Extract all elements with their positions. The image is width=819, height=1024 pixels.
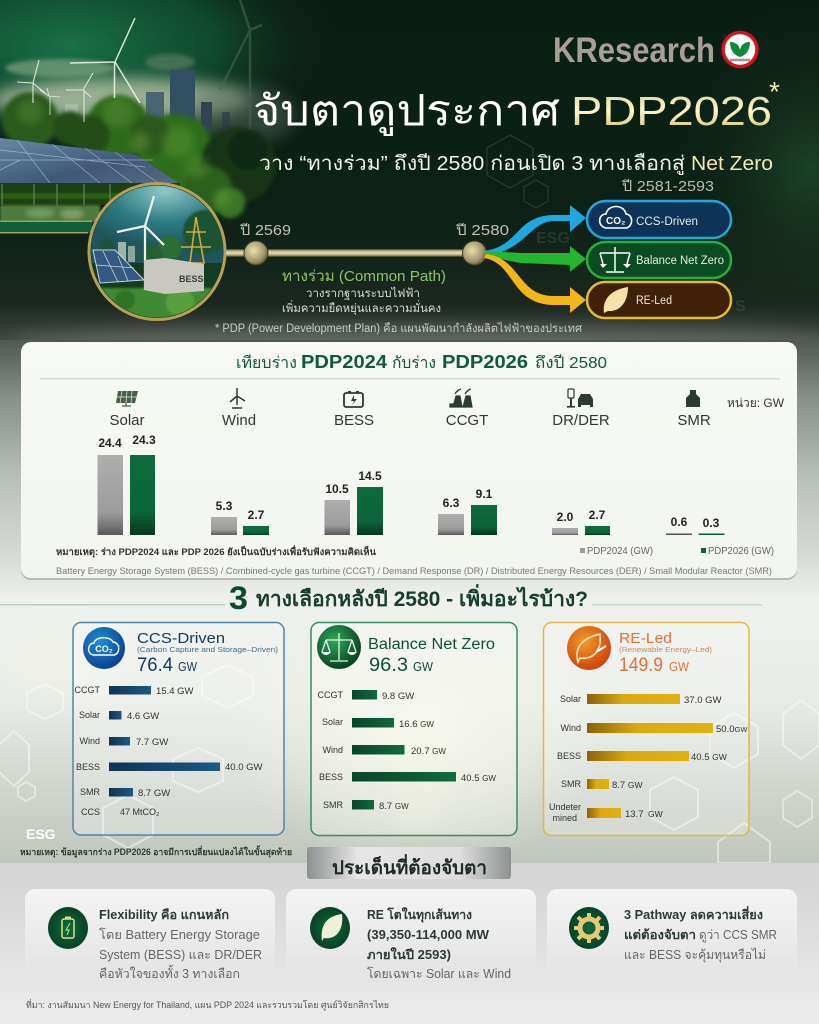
icon: leaf bbox=[310, 907, 350, 949]
category: Solar: 24.4 bbox=[98, 436, 122, 450]
icon: CO2 cloud: CO₂ bbox=[95, 644, 113, 654]
arrows: three pathways bbox=[484, 205, 586, 313]
heading bbox=[368, 636, 495, 676]
category: BESS: 14.5 bbox=[358, 469, 382, 483]
timeline: common path bbox=[226, 222, 509, 265]
text: Flexibility คือ แกนหลัก bbox=[99, 908, 229, 922]
footnote: PDP definition: * PDP (Power Development Plan) คือ แผนพัฒนากำลังผลิตไฟฟ้าของประเทศ bbox=[215, 322, 583, 335]
arrow: CCS bbox=[484, 205, 586, 256]
bar: CCGT: CCGT bbox=[318, 690, 343, 700]
chart heading bbox=[236, 352, 607, 372]
bar: SMR bbox=[323, 800, 409, 812]
bar: Wind: 50.0GW bbox=[716, 724, 748, 735]
card: RE growth bbox=[286, 889, 536, 993]
heading: RE-Led bbox=[619, 630, 672, 647]
bar: BESS bbox=[319, 772, 496, 784]
logo: KResearch: KResearch bbox=[553, 31, 715, 70]
bar: SMR: SMR bbox=[561, 779, 582, 789]
bar: BESS: 40.5 GW bbox=[691, 752, 727, 763]
bar: Wind: 20.7 GW bbox=[411, 746, 446, 757]
text: และ BESS จะคุ้มทุนหรือไม่ bbox=[624, 948, 766, 963]
bar: BESS bbox=[76, 762, 263, 773]
bar: Undetermined: GW bbox=[648, 809, 663, 819]
heading bbox=[137, 630, 279, 676]
bar: SMR bbox=[561, 779, 642, 791]
panel: CCS-Driven bbox=[73, 622, 284, 835]
heading: CCS-Driven bbox=[137, 630, 225, 647]
text: common path description bbox=[282, 268, 446, 315]
label: period 2581-2593: ปี 2581-2593 bbox=[622, 178, 714, 195]
bar: Wind bbox=[560, 723, 748, 735]
bar: Undetermined: mined bbox=[552, 813, 577, 823]
card: 3 Pathway bbox=[547, 889, 797, 993]
panel: hero background bbox=[0, 0, 819, 345]
icon: gas plant bbox=[450, 389, 472, 407]
bar: Solar bbox=[322, 717, 434, 730]
trees bbox=[2, 92, 276, 218]
icon: reactor bbox=[686, 390, 700, 407]
circle illustration: BESS: BESS bbox=[179, 274, 204, 284]
icon: CO2 cloud bbox=[83, 627, 125, 669]
bar: BESS: BESS bbox=[319, 772, 343, 782]
category: CCGT: CCGT bbox=[446, 412, 488, 429]
bar: BESS: 40.0 GW bbox=[225, 762, 263, 773]
text: common path description: ทางร่วม (Common Path) bbox=[282, 268, 446, 285]
bar: CCGT: CCGT bbox=[74, 685, 100, 695]
title: * bbox=[769, 76, 780, 107]
row: CCS bbox=[81, 807, 160, 817]
heading: three options bbox=[0, 580, 762, 616]
category: Wind bbox=[211, 388, 269, 535]
category: CCGT bbox=[438, 389, 497, 535]
pill: Balance Net Zero bbox=[587, 242, 731, 278]
heading: watch points bbox=[307, 847, 511, 879]
title: จับตาดูประกาศ bbox=[253, 87, 560, 136]
icon: EV charger and car bbox=[567, 389, 593, 408]
bar: SMR: SMR bbox=[80, 787, 100, 797]
heading: (Renewable Energy–Led) bbox=[619, 645, 713, 654]
category: Solar: 24.3 bbox=[132, 433, 156, 447]
text bbox=[367, 907, 511, 981]
grass below array bbox=[0, 183, 180, 205]
heading: (Carbon Capture and Storage–Driven) bbox=[137, 645, 279, 654]
arrow: RE bbox=[484, 254, 586, 313]
pill: Balance Net Zero: Balance Net Zero bbox=[636, 255, 724, 267]
bar: Wind: Wind bbox=[560, 723, 581, 733]
bar: SMR: 8.7 GW bbox=[138, 788, 170, 799]
subtitle: Net Zero bbox=[691, 153, 773, 175]
text: 3 Pathway ลดความเสี่ยง bbox=[624, 906, 763, 922]
text: (39,350-114,000 MW bbox=[367, 928, 489, 942]
bar: CCGT: 9.8 GW bbox=[382, 691, 414, 702]
bar: Wind: 7.7 GW bbox=[136, 737, 168, 748]
bar: BESS bbox=[557, 751, 727, 763]
heading: GW bbox=[669, 659, 690, 674]
pill: CCS-Driven: CO₂ bbox=[606, 216, 625, 227]
heading: 76.4 bbox=[137, 655, 173, 676]
arrow: Balance bbox=[486, 246, 586, 272]
heading: 149.9 bbox=[619, 655, 663, 676]
category: CCGT: 9.1 bbox=[476, 487, 493, 501]
category: DR/DER bbox=[552, 389, 610, 535]
text: โดย Battery Energy Storage bbox=[99, 927, 260, 942]
category: Wind: 5.3 bbox=[216, 499, 233, 513]
legend bbox=[580, 546, 774, 557]
heading: Balance Net Zero bbox=[368, 636, 495, 653]
category: DR/DER: 2.0 bbox=[557, 510, 574, 524]
bar: Undetermined bbox=[549, 802, 663, 823]
pill: RE-Led bbox=[587, 282, 731, 318]
bar: SMR bbox=[80, 787, 170, 799]
category: Solar bbox=[98, 391, 156, 535]
abbreviations: Battery Energy Storage System (BESS) / Combined-cycle gas turbine (CCGT) / Demand Response (DR) / Distributed Energy Resources (DER) / Small Modular Reactor (SMR) bbox=[56, 566, 772, 576]
chart heading: PDP2026 bbox=[442, 352, 528, 372]
bar: Solar: 4.6 GW bbox=[127, 711, 159, 722]
text: โดยเฉพาะ Solar และ Wind bbox=[367, 966, 511, 981]
icon: wind turbines bbox=[17, 18, 140, 122]
legend: PDP2026 (GW) bbox=[708, 546, 774, 557]
hexagon watermarks: S bbox=[735, 298, 746, 315]
text: common path description: เพิ่มความยืดหยุ่นและความมั่นคง bbox=[282, 300, 441, 315]
pill: CCS-Driven: CCS-Driven bbox=[636, 216, 698, 228]
bar: SMR: 8.7 GW bbox=[612, 780, 642, 791]
heading: GW bbox=[178, 659, 198, 674]
panel: Balance Net Zero bbox=[311, 622, 517, 836]
timeline: common path: ปี 2580 bbox=[456, 222, 509, 239]
bar: Solar: Solar bbox=[79, 710, 100, 720]
hexagon watermarks: ESG bbox=[536, 230, 570, 247]
panel: watch points background bbox=[0, 863, 819, 1024]
icon: solar panel bbox=[116, 391, 138, 406]
bar: BESS: BESS bbox=[76, 762, 100, 772]
heading: GW bbox=[413, 659, 434, 674]
panel: middle background bbox=[0, 340, 819, 870]
chart heading: ถึงปี 2580 bbox=[535, 354, 607, 372]
timeline: common path: ปี 2569 bbox=[240, 222, 291, 239]
bar: Wind bbox=[79, 736, 168, 748]
solar array bbox=[0, 138, 178, 183]
category: SMR: 0.3 bbox=[703, 516, 720, 530]
note: draft data: หมายเหตุ: ข้อมูลจากร่าง PDP2026 อาจมีการเปลี่ยนแปลงได้ในขั้นสุดท้าย bbox=[20, 845, 292, 858]
icon: wind turbine bbox=[230, 388, 245, 408]
smoke at hero bottom bbox=[10, 326, 819, 354]
bar: Undetermined: 13.7 bbox=[625, 809, 644, 820]
pill: CCS-Driven bbox=[587, 201, 731, 238]
category: Wind: Wind bbox=[222, 412, 256, 429]
source: ที่มา: งานสัมมนา New Energy for Thailand, แผน PDP 2024 และรวบรวมโดย ศูนย์วิจัยกสิกรไทย bbox=[26, 998, 389, 1011]
bar: Solar: Solar bbox=[560, 694, 581, 704]
heading: three options: 3 bbox=[229, 580, 248, 616]
category: BESS: BESS bbox=[334, 412, 374, 429]
bar: CCGT: 15.4 GW bbox=[156, 686, 194, 697]
buildings bbox=[170, 70, 195, 120]
panel: RE-Led bbox=[544, 622, 749, 836]
category: CCGT: 6.3 bbox=[443, 496, 460, 510]
bar: Wind: Wind bbox=[79, 736, 100, 746]
panel: PDP comparison chart bbox=[21, 342, 797, 580]
chart heading: กับร่าง bbox=[392, 355, 436, 372]
icon: scales bbox=[317, 625, 361, 669]
category: DR/DER: 2.7 bbox=[589, 508, 606, 522]
title: PDP2026 bbox=[571, 88, 772, 134]
row: CCS: CCS bbox=[81, 807, 100, 817]
category: Solar: Solar bbox=[109, 412, 145, 429]
text: common path description: วางรากฐานระบบไฟฟ้า bbox=[306, 287, 420, 300]
text: ภายในปี 2593) bbox=[367, 947, 451, 962]
bar: BESS: 40.5 GW bbox=[461, 773, 496, 784]
category: BESS: 10.5 bbox=[325, 482, 349, 496]
pill: RE-Led: RE-Led bbox=[636, 295, 672, 307]
category: SMR bbox=[666, 390, 724, 535]
chart note: หมายเหตุ: ร่าง PDP2024 และ PDP 2026 ยังเป็นฉบับร่างเพื่อรับฟังความคิดเห็น bbox=[56, 544, 377, 558]
chart heading: เทียบร่าง bbox=[236, 354, 297, 372]
text: ดูว่า CCS SMR bbox=[699, 928, 777, 943]
heading: 96.3 bbox=[369, 655, 408, 676]
icon: leaf plug bbox=[567, 626, 611, 670]
bar: Wind bbox=[322, 745, 446, 757]
text bbox=[99, 908, 262, 981]
text: แต่ต้องจับตา bbox=[624, 928, 696, 942]
text: System (BESS) และ DR/DER bbox=[99, 948, 262, 962]
bar: Undetermined: Undeter bbox=[549, 802, 581, 812]
bar: CCGT bbox=[318, 690, 414, 702]
heading: watch points: ประเด็นที่ต้องจับตา bbox=[332, 854, 487, 879]
text: คือหัวใจของทั้ง 3 ทางเลือก bbox=[99, 964, 240, 981]
title bbox=[253, 76, 780, 136]
panel: middle background: ESG bbox=[26, 826, 56, 842]
bar: Solar bbox=[560, 694, 722, 706]
bar: CCGT bbox=[74, 685, 194, 697]
bar: Solar: 16.6 GW bbox=[399, 719, 434, 730]
category: BESS bbox=[324, 391, 383, 535]
bar: Solar: Solar bbox=[322, 717, 343, 727]
category: SMR: 0.6 bbox=[671, 515, 688, 529]
circle illustration: BESS bbox=[88, 183, 228, 324]
icon: battery bbox=[344, 391, 363, 407]
legend: PDP2024 (GW) bbox=[587, 546, 653, 557]
unit label: หน่วย: GW bbox=[727, 396, 785, 410]
bar: Solar: 37.0 GW bbox=[684, 695, 722, 706]
bar: SMR: 8.7 GW bbox=[379, 801, 409, 812]
category: Wind: 2.7 bbox=[248, 508, 265, 522]
card: Flexibility bbox=[25, 889, 275, 993]
heading bbox=[619, 630, 713, 676]
heading: three options: ทางเลือกหลังปี 2580 - เพิ่มอะไรบ้าง? bbox=[256, 583, 588, 611]
ghost turbine bbox=[220, 0, 262, 130]
category: DR/DER: DR/DER bbox=[552, 412, 610, 429]
category: SMR: SMR bbox=[677, 412, 711, 429]
bar: BESS: BESS bbox=[557, 751, 581, 761]
hexagon watermarks bbox=[487, 135, 746, 315]
bar: Wind: Wind bbox=[322, 745, 343, 755]
text bbox=[624, 906, 777, 963]
bar: Solar bbox=[79, 710, 159, 722]
bar: SMR: SMR bbox=[323, 800, 344, 810]
icon: gear bbox=[569, 907, 609, 949]
icon: battery bbox=[48, 907, 88, 949]
text: RE โตในทุกเส้นทาง bbox=[367, 907, 472, 923]
chart heading: PDP2024 bbox=[301, 352, 387, 372]
row: CCS: 47 MtCO₂ bbox=[120, 807, 160, 817]
subtitle: วาง “ทางร่วม” ถึงปี 2580 ก่อนเปิด 3 ทางเลือกสู่ bbox=[259, 153, 685, 176]
